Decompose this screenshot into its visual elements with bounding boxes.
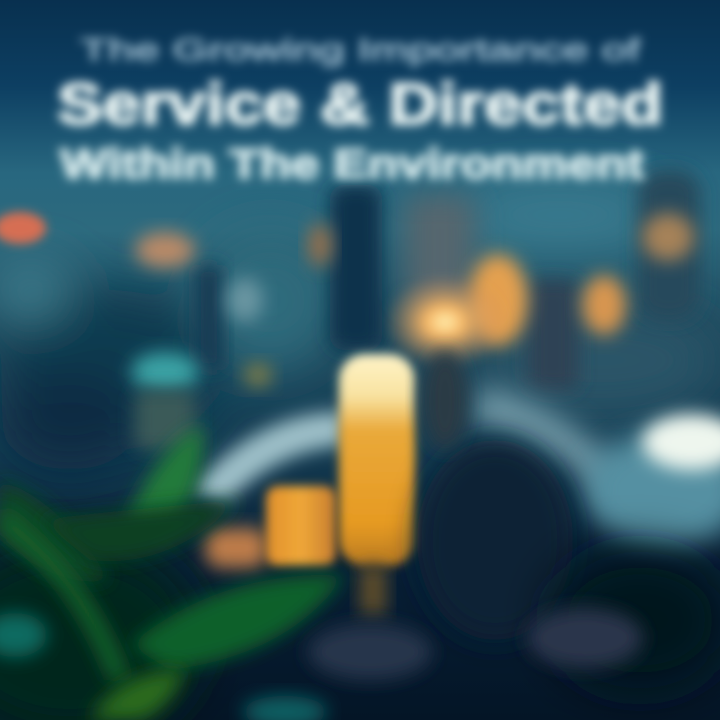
plant leaves xyxy=(0,425,345,720)
left leaf xyxy=(0,480,110,582)
left tower xyxy=(195,265,223,370)
title line 1: The Growing Importance of xyxy=(80,32,641,67)
dark foreground mass xyxy=(417,350,720,690)
right-hand bridge xyxy=(470,385,640,510)
small bar xyxy=(205,528,267,568)
lower leaf xyxy=(90,670,185,720)
title line 2: Service & Directed xyxy=(57,72,663,137)
pale building xyxy=(227,278,263,322)
right leaf xyxy=(130,575,345,670)
title text xyxy=(57,32,663,187)
mid tower xyxy=(405,195,475,305)
upper leaf xyxy=(125,425,203,535)
stem xyxy=(0,505,130,680)
stem under tall bar xyxy=(360,565,386,615)
teal patch left xyxy=(0,613,47,657)
title line 3: Within The Environment xyxy=(60,140,644,187)
skyline xyxy=(0,170,720,470)
coin bars xyxy=(205,354,415,615)
medium bar xyxy=(266,486,336,566)
teal patch bottom xyxy=(243,696,327,720)
white dome xyxy=(585,414,720,548)
teal dome marker xyxy=(131,352,199,392)
grey foreground blobs xyxy=(308,608,643,680)
bridge arc xyxy=(190,412,345,505)
right tower xyxy=(638,170,700,320)
tower at right-centre xyxy=(528,280,578,390)
centre leaf xyxy=(40,500,240,561)
small building under marker xyxy=(135,390,195,450)
city lights xyxy=(0,212,694,387)
dark central tower xyxy=(330,185,382,350)
tall bar xyxy=(339,354,415,566)
